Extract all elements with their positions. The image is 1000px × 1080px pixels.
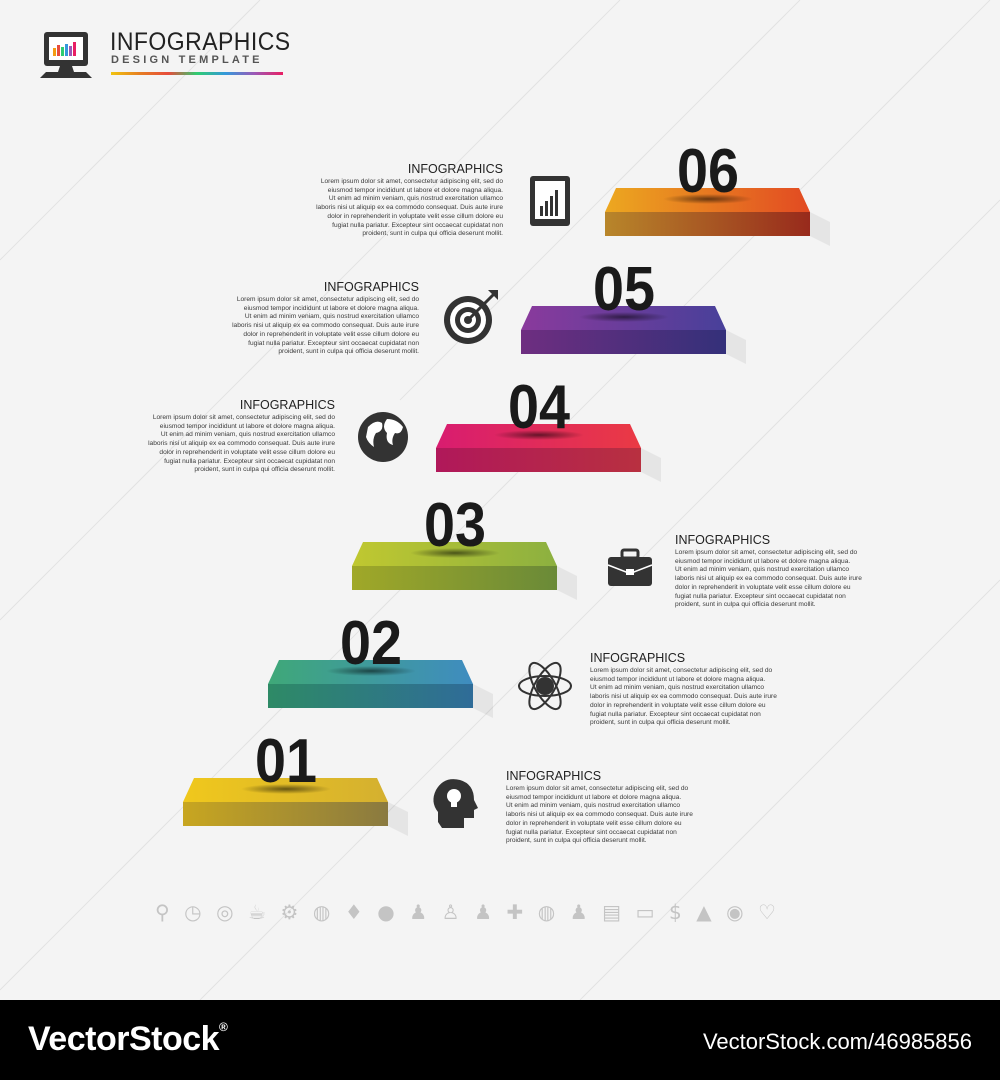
footer bar [0, 1000, 1000, 1080]
text block 01: eiusmod tempor incididunt ut labore et dolore magna aliqua. [506, 794, 681, 801]
footer url: VectorStock.com/46985856 [703, 1029, 972, 1054]
step 01 [183, 727, 408, 836]
icon: atom [519, 658, 571, 714]
step 03 [352, 491, 577, 600]
text block 04: eiusmod tempor incididunt ut labore et dolore magna aliqua. [160, 423, 335, 430]
text block 05: laboris nisi ut aliquip ex ea commodo consequat. Duis aute irure [232, 322, 419, 329]
text block 05: fugiat nulla pariatur. Excepteur sint occaecat cupidatat non [248, 340, 419, 347]
text block 03: Ut enim ad minim veniam, quis nostrud exercitation ullamco [675, 566, 849, 573]
text block 06 [316, 162, 503, 237]
text block 06: Lorem ipsum dolor sit amet, consectetur adipiscing elit, sed do [321, 178, 503, 185]
text block 06: laboris nisi ut aliquip ex ea commodo consequat. Duis aute irure [316, 204, 503, 211]
text block 02: Lorem ipsum dolor sit amet, consectetur adipiscing elit, sed do [590, 667, 772, 674]
step 06 [605, 137, 830, 246]
text block 06: INFOGRAPHICS [408, 162, 503, 176]
text block 03: eiusmod tempor incididunt ut labore et dolore magna aliqua. [675, 558, 850, 565]
text block 03: proident, sunt in culpa qui officia deserunt mollit. [675, 601, 816, 608]
text block 06: Ut enim ad minim veniam, quis nostrud exercitation ullamco [329, 195, 503, 202]
text block 01: fugiat nulla pariatur. Excepteur sint occaecat cupidatat non [506, 829, 677, 836]
text block 05: dolor in reprehenderit in voluptate velit esse cillum dolore eu [243, 331, 419, 338]
text block 06: eiusmod tempor incididunt ut labore et dolore magna aliqua. [328, 187, 503, 194]
header logo: DESIGN TEMPLATE [111, 54, 263, 66]
text block 04: dolor in reprehenderit in voluptate velit esse cillum dolore eu [159, 449, 335, 456]
text block 05: INFOGRAPHICS [324, 280, 419, 294]
step 06: 06 [677, 137, 739, 206]
text block 03: Lorem ipsum dolor sit amet, consectetur adipiscing elit, sed do [675, 549, 857, 556]
text block 02: dolor in reprehenderit in voluptate velit esse cillum dolore eu [590, 702, 766, 709]
text block 04: laboris nisi ut aliquip ex ea commodo consequat. Duis aute irure [148, 440, 335, 447]
step 04: 04 [508, 373, 570, 442]
text block 02: Ut enim ad minim veniam, quis nostrud exercitation ullamco [590, 684, 764, 691]
step 04 [436, 373, 661, 482]
step 01: 01 [255, 727, 317, 796]
text block 04: proident, sunt in culpa qui officia deserunt mollit. [194, 466, 335, 473]
icon row: ⚲◷◎☕⚙◍♦●♟♙♟✚◍♟▤▭$▲◉♡ [155, 900, 790, 924]
text block 04: Lorem ipsum dolor sit amet, consectetur adipiscing elit, sed do [153, 414, 335, 421]
text block 01: dolor in reprehenderit in voluptate velit esse cillum dolore eu [506, 820, 682, 827]
text block 04: INFOGRAPHICS [240, 398, 335, 412]
text block 03: INFOGRAPHICS [675, 533, 770, 547]
icon: tablet chart [530, 176, 570, 226]
text block 02: fugiat nulla pariatur. Excepteur sint occaecat cupidatat non [590, 711, 761, 718]
text block 01: proident, sunt in culpa qui officia deserunt mollit. [506, 837, 647, 844]
step 05 [521, 255, 746, 364]
text block 02: proident, sunt in culpa qui officia deserunt mollit. [590, 719, 731, 726]
text block 02: eiusmod tempor incididunt ut labore et dolore magna aliqua. [590, 676, 765, 683]
text block 02 [590, 651, 777, 726]
text block 02: laboris nisi ut aliquip ex ea commodo consequat. Duis aute irure [590, 693, 777, 700]
step 03: 03 [424, 491, 486, 560]
text block 01: INFOGRAPHICS [506, 769, 601, 783]
text block 01: Lorem ipsum dolor sit amet, consectetur adipiscing elit, sed do [506, 785, 688, 792]
step 05: 05 [593, 255, 655, 324]
title text: INFOGRAPHICS [110, 28, 291, 56]
header logo [40, 28, 291, 78]
text block 06: fugiat nulla pariatur. Excepteur sint occaecat cupidatat non [332, 222, 503, 229]
text block 05 [232, 280, 419, 355]
text block 06: dolor in reprehenderit in voluptate velit esse cillum dolore eu [327, 213, 503, 220]
icon: globe [358, 412, 408, 462]
text block 05: Lorem ipsum dolor sit amet, consectetur adipiscing elit, sed do [237, 296, 419, 303]
text block 01: Ut enim ad minim veniam, quis nostrud exercitation ullamco [506, 802, 680, 809]
text block 04 [148, 398, 335, 473]
text block 05: Ut enim ad minim veniam, quis nostrud exercitation ullamco [245, 313, 419, 320]
text block 05: proident, sunt in culpa qui officia deserunt mollit. [278, 348, 419, 355]
text block 06: proident, sunt in culpa qui officia deserunt mollit. [362, 230, 503, 237]
text block 04: fugiat nulla pariatur. Excepteur sint occaecat cupidatat non [164, 458, 335, 465]
text block 03: fugiat nulla pariatur. Excepteur sint occaecat cupidatat non [675, 593, 846, 600]
text block 03: laboris nisi ut aliquip ex ea commodo consequat. Duis aute irure [675, 575, 862, 582]
text block 02: INFOGRAPHICS [590, 651, 685, 665]
text block 04: Ut enim ad minim veniam, quis nostrud exercitation ullamco [161, 431, 335, 438]
step 02 [268, 609, 493, 718]
icon: target [444, 290, 498, 344]
text block 03: dolor in reprehenderit in voluptate velit esse cillum dolore eu [675, 584, 851, 591]
text block 03 [675, 533, 862, 608]
icon: briefcase [608, 550, 652, 586]
icon: head with bulb [433, 779, 478, 828]
footer brand: VectorStock® [28, 1020, 227, 1058]
text block 01 [506, 769, 693, 844]
text block 01: laboris nisi ut aliquip ex ea commodo consequat. Duis aute irure [506, 811, 693, 818]
step 02: 02 [340, 609, 402, 678]
icon: monitor [40, 32, 92, 78]
text block 05: eiusmod tempor incididunt ut labore et dolore magna aliqua. [244, 305, 419, 312]
